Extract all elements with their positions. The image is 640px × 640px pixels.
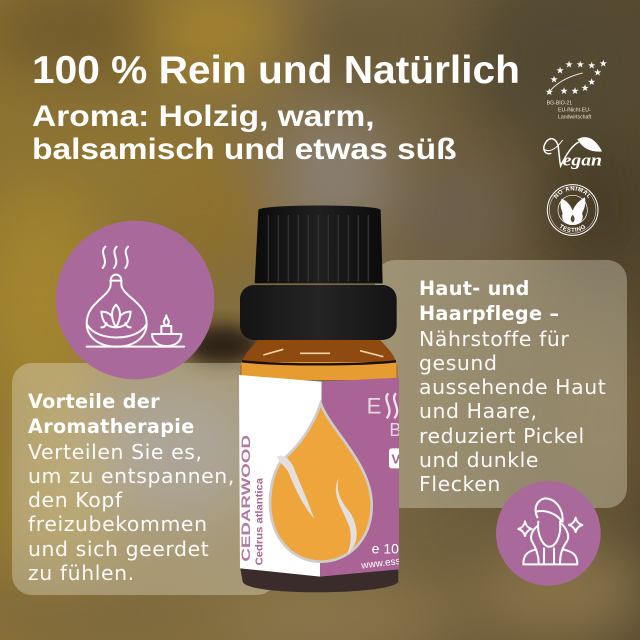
cap collar <box>240 285 397 340</box>
text: skin and hair care: Haut- und <box>419 277 530 300</box>
brand text on label <box>361 392 399 568</box>
glass shoulder <box>241 340 397 380</box>
subtitle: aroma <box>32 100 457 166</box>
icon: no animal testing <box>546 184 598 236</box>
icon: EU organic leaf: ★ <box>545 87 554 98</box>
icon: no animal testing: NO ANIMAL <box>553 186 590 199</box>
text: aromatherapy benefits: freizubekommen <box>28 512 208 536</box>
icon: no animal testing: TESTING <box>560 224 586 232</box>
text: aromatherapy benefits: zu fühlen. <box>28 561 135 585</box>
text: aromatherapy benefits: Vorteile der <box>28 390 160 413</box>
icon: EU organic leaf <box>545 59 608 120</box>
bottle base <box>240 567 398 592</box>
subtitle: aroma: balsamisch und etwas süß <box>32 133 457 166</box>
subtitle: aroma: Aroma: Holzig, warm, <box>32 100 375 133</box>
icon: EU organic leaf: ★ <box>560 86 568 97</box>
certification icons <box>543 59 608 236</box>
icon: EU organic leaf: ★ <box>599 59 608 70</box>
panel: aromatherapy background <box>12 363 277 595</box>
text: skin and hair care: reduziert Pickel <box>419 424 585 448</box>
latin name: Cedrus atlantica <box>255 477 266 565</box>
icon: EU organic leaf: ★ <box>593 68 602 79</box>
text: aromatherapy benefits: Aromatherapie <box>28 415 195 438</box>
icon: EU organic leaf: ★ <box>576 59 585 70</box>
icon: EU organic leaf: BG-BIO-21 <box>547 100 572 106</box>
text: aromatherapy benefits: Verteilen Sie es, <box>28 440 203 464</box>
brand text on label: E <box>367 393 381 418</box>
brand text on label: www.esse <box>360 555 407 572</box>
text: aromatherapy benefits <box>28 390 235 585</box>
drop emblem <box>270 403 372 562</box>
icon: EU organic leaf: ★ <box>581 83 589 94</box>
text: skin and hair care: aussehende Haut <box>419 375 606 399</box>
panel: haircare background <box>375 260 627 508</box>
text: skin and hair care: Nährstoffe für <box>419 327 569 351</box>
text: skin and hair care: Haarpflege – <box>419 302 559 325</box>
icon: hair and skin care circle <box>496 481 601 586</box>
text: skin and hair care <box>419 277 606 496</box>
text: skin and hair care: Flecken <box>419 472 501 496</box>
text: skin and hair care: und Haare, <box>419 399 538 423</box>
cap ribs <box>255 206 383 283</box>
icon: diffuser circle <box>56 220 214 380</box>
icon: EU organic leaf: Landwirtschaft <box>558 114 592 120</box>
product name: CEDARWOOD <box>239 435 253 562</box>
icon: EU organic leaf: ★ <box>565 59 573 70</box>
product bottle <box>239 206 399 592</box>
icon: EU organic leaf: ★ <box>587 60 596 71</box>
icon: vegan: egan <box>563 150 602 169</box>
text: aromatherapy benefits: und sich geerdet <box>28 537 209 561</box>
text: aromatherapy benefits: den Kopf <box>28 488 123 512</box>
title: 100 % Rein und Natürlich <box>32 49 520 92</box>
text: skin and hair care: und dunkle <box>419 448 539 472</box>
icon: EU organic leaf: ★ <box>556 65 564 76</box>
brand text on label: e 10 <box>372 540 399 556</box>
text: skin and hair care: gesund <box>419 351 498 375</box>
icon: EU organic leaf: ★ <box>587 77 596 88</box>
icon: EU organic leaf: EU-/Nicht-EU- <box>558 107 591 113</box>
icon: EU organic leaf: ★ <box>571 86 579 97</box>
label <box>239 375 409 577</box>
icon: EU organic leaf: ★ <box>550 75 558 86</box>
brand text on label: V <box>391 451 400 466</box>
brand text on label: B <box>389 420 401 440</box>
icon: vegan <box>544 137 602 169</box>
text: aromatherapy benefits: um zu entspannen, <box>28 464 235 488</box>
